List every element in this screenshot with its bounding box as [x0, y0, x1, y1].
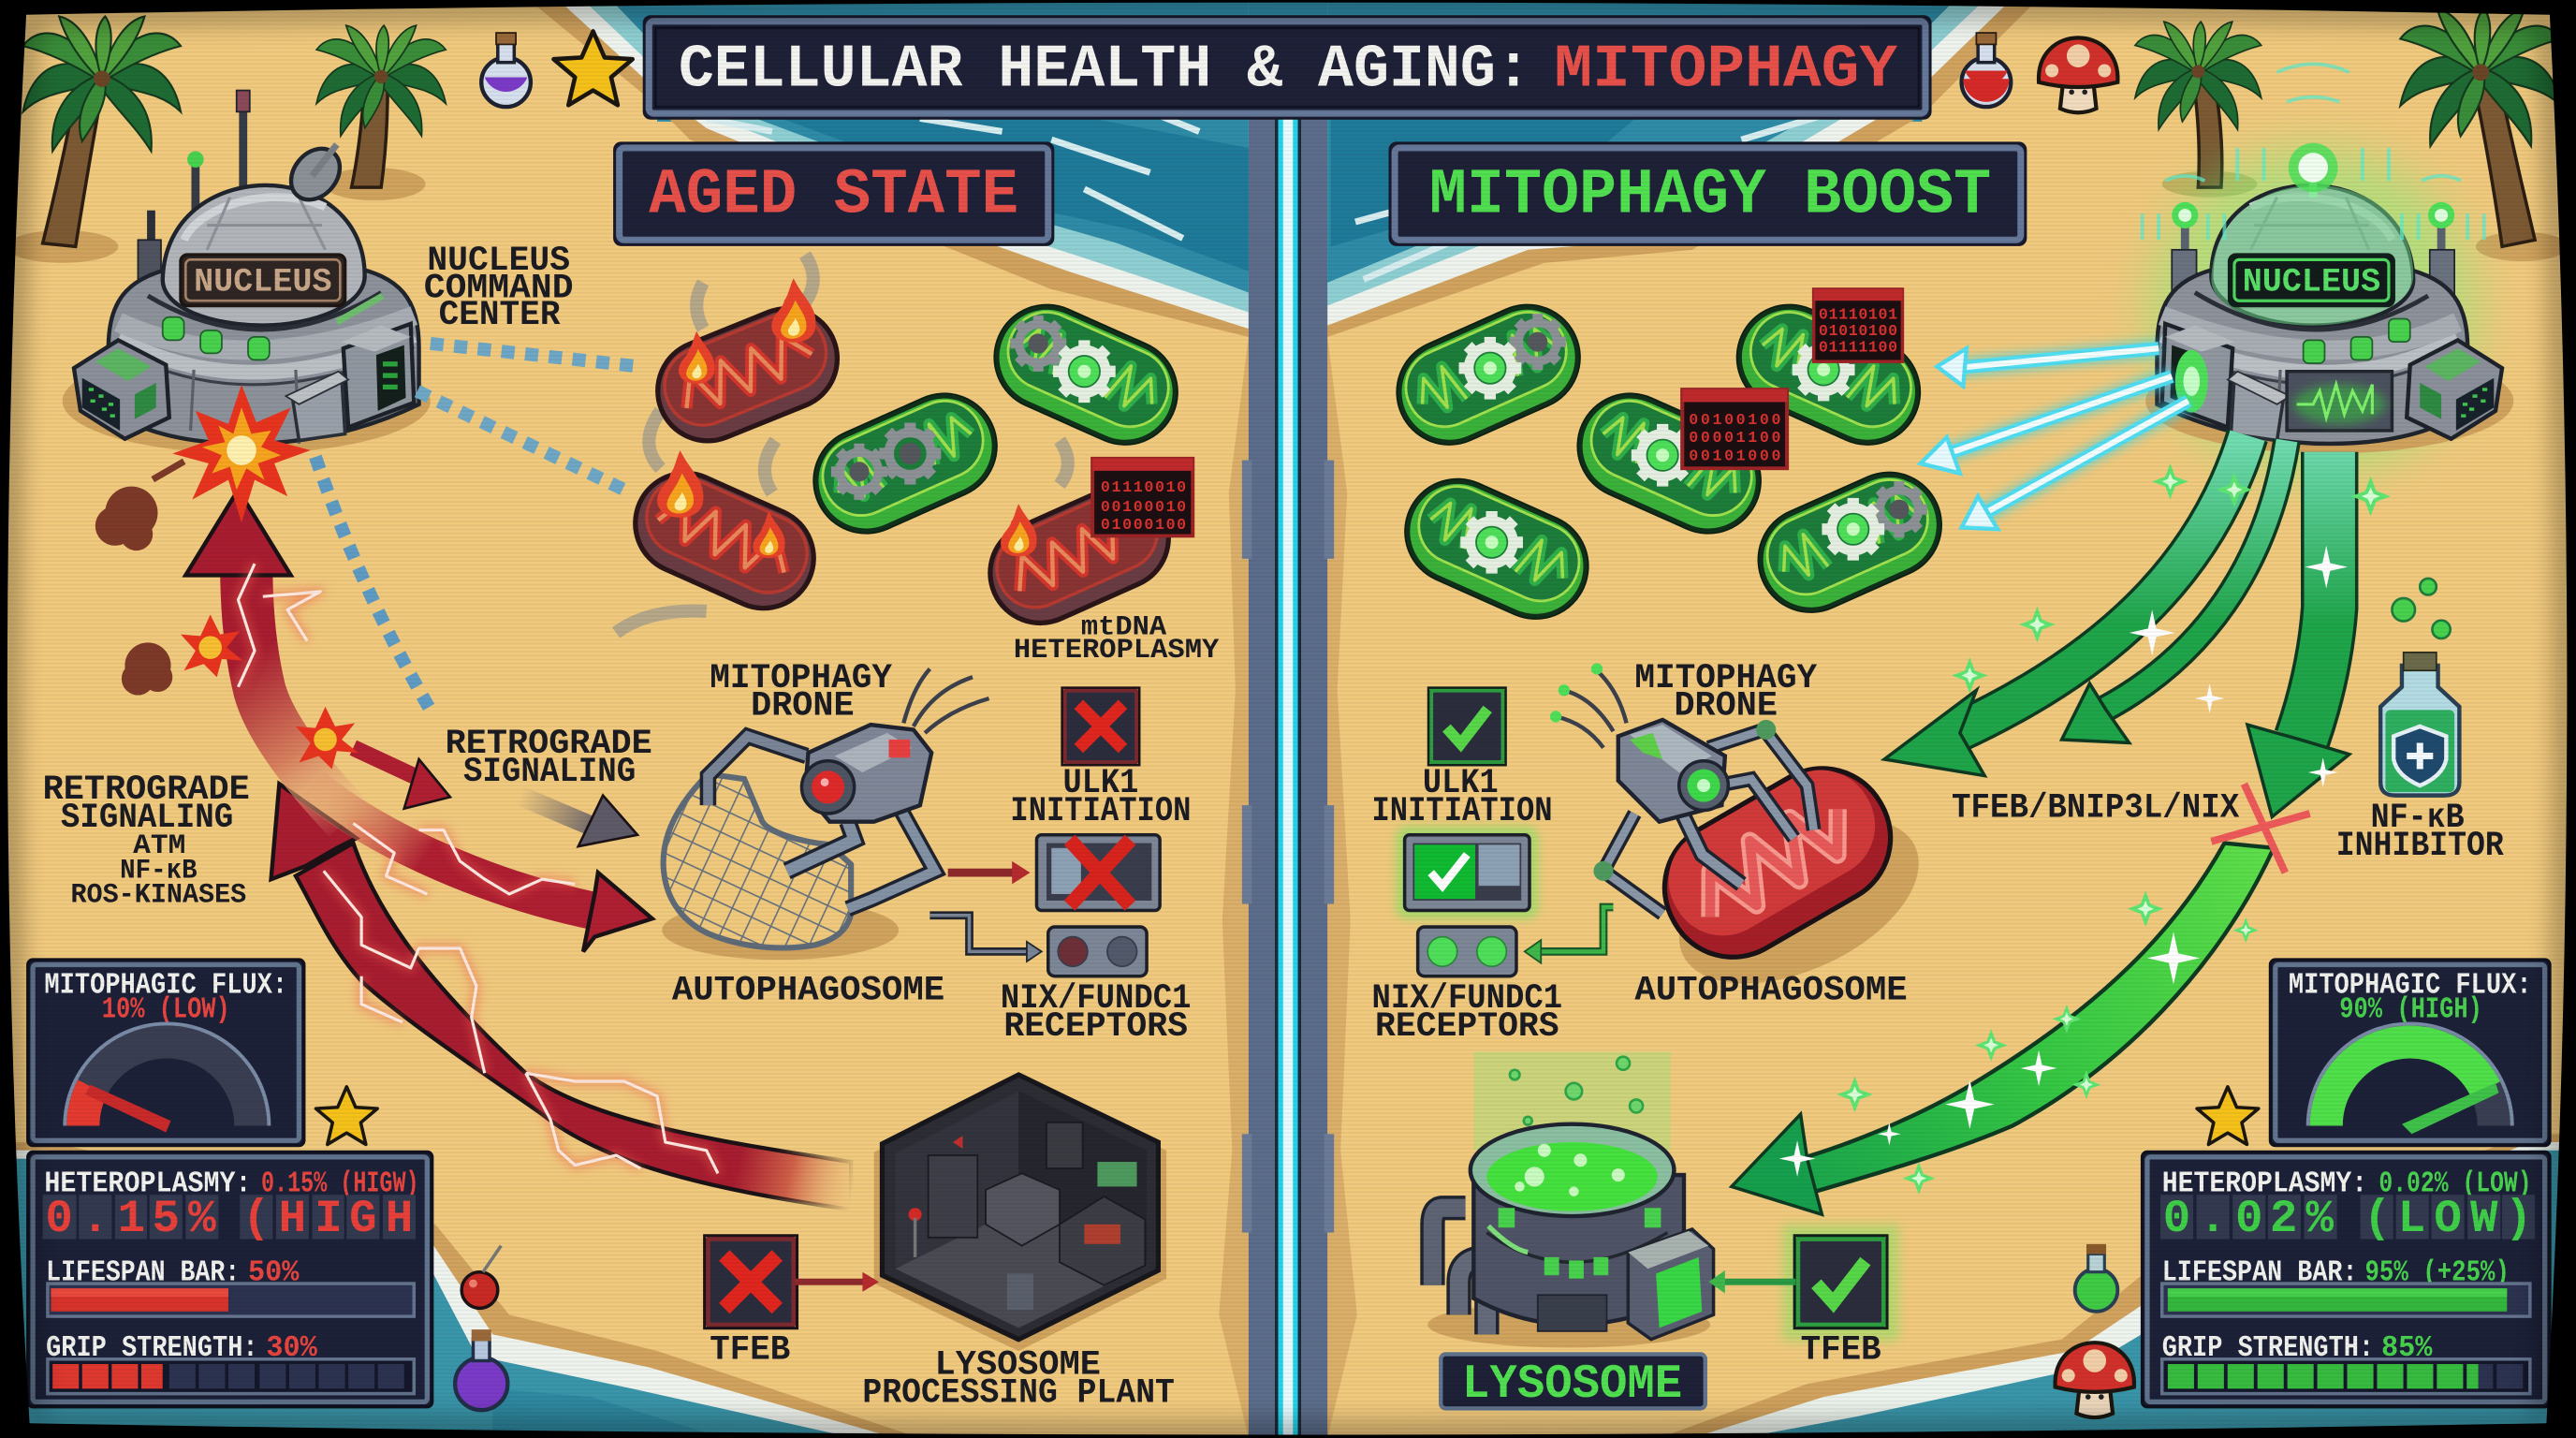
icon: tfeb check — [1782, 1225, 1899, 1341]
panel: mitophagic flux low: MITOPHAGIC FLUX: — [44, 969, 287, 1002]
icon: ulk1 x — [1062, 688, 1139, 765]
label: tfeb bnip3l nix: TFEB/BNIP3L/NIX — [1952, 788, 2240, 828]
green arrow large to lysosome — [1732, 844, 2274, 1214]
readout aged: H — [386, 1193, 413, 1245]
label: nix receptors left: NIX/FUNDC1 — [1001, 979, 1191, 1019]
arrow: to switch — [948, 861, 1030, 884]
label: nucleus command center: NUCLEUS — [427, 242, 570, 281]
code panel lower right — [1682, 389, 1787, 468]
lysosome processing plant — [874, 1075, 1166, 1351]
icon: purple potion bottom — [455, 1329, 507, 1410]
drone left with net — [662, 668, 989, 960]
title banner: CELLULAR HEALTH & AGING: — [679, 35, 1531, 104]
icon: star left panel — [315, 1087, 377, 1144]
receptors on — [1418, 927, 1516, 976]
connector green — [1525, 907, 1614, 963]
label: mitophagy drone right: DRONE — [1674, 687, 1778, 726]
green arrow B — [2062, 440, 2287, 742]
label: ulk1 initiation left: INITIATION — [1010, 792, 1191, 831]
dotted signal lines — [315, 344, 639, 710]
block marker x — [2211, 784, 2310, 873]
mitochondria healthy with gears — [797, 288, 1194, 550]
title banner: MITOPHAGY — [1554, 35, 1897, 104]
readout aged: G — [349, 1193, 377, 1245]
grip bar aged — [48, 1359, 414, 1394]
panel: stats aged: LIFESPAN BAR: — [46, 1256, 240, 1289]
nucleus right — [2143, 64, 2513, 477]
panel: stats aged: GRIP STRENGTH: — [46, 1332, 258, 1365]
label: mtdna heteroplasmy: mtDNA — [1081, 611, 1166, 643]
label: nucleus command center: CENTER — [439, 296, 561, 335]
code panel left: 00100010 — [1101, 499, 1186, 517]
label: mitophagy drone left — [710, 659, 893, 726]
panel: stats boosted: LIFESPAN BAR: — [2162, 1256, 2358, 1289]
label: nix receptors right: RECEPTORS — [1375, 1007, 1559, 1047]
label: retrograde signaling left: RETROGRADE — [43, 770, 250, 810]
readout aged — [43, 1193, 416, 1245]
icon: mushroom bottom — [2056, 1343, 2134, 1417]
icon: mushroom top — [2039, 37, 2117, 112]
readout boosted: % — [2305, 1193, 2334, 1245]
label: mtdna heteroplasmy — [1014, 611, 1219, 666]
switch enabled — [1397, 827, 1538, 918]
panel: stats boosted — [2143, 1152, 2550, 1407]
label: nix receptors left — [1001, 979, 1191, 1047]
nucleus sign right: NUCLEUS — [2243, 264, 2380, 301]
label: lysosome processing plant — [862, 1346, 1175, 1413]
label: nix receptors right: NIX/FUNDC1 — [1372, 979, 1562, 1019]
panel: stats aged: 50% — [248, 1256, 299, 1289]
label: mitophagy drone left: MITOPHAGY — [710, 659, 893, 698]
panel: stats aged — [28, 1152, 432, 1407]
heading: lysosome: LYSOSOME — [1462, 1358, 1682, 1412]
label: retrograde signaling center — [446, 725, 652, 792]
label: retrograde signaling left: ATM — [133, 829, 185, 861]
ocean: top center — [529, 0, 2037, 337]
icon: star top — [553, 31, 633, 105]
readout boosted: 0 — [2235, 1193, 2262, 1245]
label: nucleus command center — [424, 242, 574, 335]
arrow: tfeb to lysosome — [1708, 1270, 1795, 1294]
readout aged: 5 — [153, 1193, 180, 1245]
code panel lower right: 00001100 — [1689, 430, 1781, 448]
readout aged: ( — [242, 1193, 271, 1245]
icon: tfeb x — [705, 1236, 798, 1328]
small red arrow — [353, 748, 450, 809]
label: nf-kb inhibitor: NF-κB — [2371, 799, 2465, 838]
lysosome vat — [1427, 1051, 1714, 1347]
lifespan bar aged — [48, 1284, 414, 1316]
readout boosted: . — [2199, 1193, 2227, 1245]
code panel upper right: 01111100 — [1819, 340, 1897, 358]
icon: red potion top — [1962, 33, 2011, 107]
label: nix receptors left: RECEPTORS — [1003, 1007, 1188, 1047]
panel: stats boosted: 0.02% (LOW) — [2378, 1168, 2532, 1201]
receptors off — [1048, 927, 1147, 976]
label: tfeb left: TFEB — [710, 1331, 790, 1371]
readout boosted — [2160, 1193, 2535, 1245]
code panel left — [1092, 459, 1193, 536]
switch disabled — [1036, 835, 1160, 911]
readout aged: I — [315, 1193, 343, 1245]
panel: stats boosted: GRIP STRENGTH: — [2162, 1332, 2374, 1365]
heading: mitophagy boost — [1390, 143, 2026, 245]
readout aged: 0 — [45, 1193, 73, 1245]
drone right with mitochondrion — [1550, 663, 1944, 1018]
label: nf-kb inhibitor: INHIBITOR — [2336, 827, 2505, 866]
label: lysosome processing plant: LYSOSOME — [935, 1346, 1101, 1386]
nucleus left — [63, 91, 431, 453]
code panel upper right — [1814, 289, 1902, 361]
connector to receptors — [929, 916, 1042, 961]
gray arrow — [520, 796, 637, 846]
icon: bomb — [461, 1246, 501, 1308]
label: autophagosome right: AUTOPHAGOSOME — [1634, 971, 1908, 1010]
label: mitophagy drone left: DRONE — [751, 687, 855, 726]
cyan arrows — [1921, 348, 2188, 529]
lightning — [238, 564, 718, 1173]
heading: mitophagy boost: MITOPHAGY BOOST — [1429, 158, 1991, 231]
mitochondria damaged — [616, 255, 1188, 642]
explosion small center — [296, 707, 359, 770]
mitochondrion captured — [1637, 741, 1918, 985]
label: retrograde signaling left: NF-κB — [120, 854, 198, 886]
lifespan bar boosted — [2162, 1284, 2530, 1316]
label: retrograde signaling center: RETROGRADE — [446, 725, 652, 764]
label: nucleus command center: COMMAND — [424, 270, 574, 309]
label: tfeb right: TFEB — [1801, 1331, 1881, 1371]
nucleus sign — [181, 255, 345, 306]
code panel upper right: 01010100 — [1819, 323, 1897, 341]
ocean: bottom corners — [0, 1134, 2576, 1438]
label: ulk1 initiation right — [1372, 764, 1553, 831]
readout boosted: 2 — [2270, 1193, 2297, 1245]
label: retrograde signaling left: SIGNALING — [61, 799, 233, 838]
icon: ulk1 check — [1428, 688, 1506, 765]
code panel lower right: 00101000 — [1689, 448, 1781, 466]
readout boosted: O — [2434, 1193, 2462, 1245]
readout aged: % — [188, 1193, 216, 1245]
gauge low — [66, 1024, 269, 1132]
panel: stats boosted: 85% — [2381, 1332, 2432, 1365]
panel: mitophagic flux high: 90% (HIGH) — [2339, 994, 2482, 1027]
readout boosted: ) — [2505, 1193, 2532, 1245]
green arrow C — [2247, 452, 2349, 816]
label: autophagosome left: AUTOPHAGOSOME — [672, 971, 944, 1010]
heading: aged state — [614, 143, 1053, 245]
code panel upper right: 01110101 — [1819, 307, 1897, 325]
label: ulk1 initiation left: ULK1 — [1063, 764, 1138, 803]
readout boosted: 0 — [2163, 1193, 2190, 1245]
label: ulk1 initiation right: INITIATION — [1372, 792, 1553, 831]
arrow: tfeb to plant — [795, 1272, 879, 1292]
panel: stats boosted: 95% (+25%) — [2364, 1256, 2510, 1289]
readout aged: H — [279, 1193, 306, 1245]
panel: stats aged: 30% — [266, 1332, 317, 1365]
palm trees — [7, 8, 2568, 263]
smoke puff upper — [95, 459, 185, 550]
label: nf-kb inhibitor — [2336, 799, 2505, 866]
panel: mitophagic flux high — [2271, 960, 2550, 1146]
center divider — [1242, 115, 1334, 1438]
icon: green potion — [2075, 1244, 2117, 1312]
title banner — [644, 17, 1930, 118]
red arrow: retrograde up — [185, 490, 348, 818]
smoke puff lower — [122, 642, 172, 696]
red arrow: lower arc — [271, 784, 851, 1210]
panel: mitophagic flux high: MITOPHAGIC FLUX: — [2289, 969, 2532, 1002]
green arrow A — [1884, 435, 2247, 776]
label: mitophagy drone right — [1634, 659, 1818, 726]
label: retrograde signaling center: SIGNALING — [463, 753, 636, 792]
readout boosted: W — [2470, 1193, 2498, 1245]
red arrow: to drone — [312, 785, 652, 951]
label: retrograde signaling left — [43, 770, 250, 911]
label: mtdna heteroplasmy: HETEROPLASMY — [1014, 634, 1219, 666]
readout boosted: ( — [2364, 1193, 2391, 1245]
gauge high — [2308, 1024, 2512, 1134]
icon: star right panel — [2197, 1087, 2259, 1144]
explosion main — [172, 385, 311, 522]
nucleus sign right — [2230, 255, 2393, 306]
panel: stats aged: 0.15% (HIGW) — [261, 1168, 419, 1201]
autophagosome net — [664, 774, 851, 947]
mitochondria healthy right — [1380, 288, 1958, 636]
label: ulk1 initiation left — [1010, 764, 1191, 831]
panel: stats boosted: HETEROPLASMY: — [2162, 1168, 2367, 1201]
explosion small left — [181, 615, 243, 677]
readout aged: 1 — [118, 1193, 145, 1245]
readout aged: . — [81, 1193, 110, 1245]
code panel left: 01000100 — [1101, 517, 1186, 535]
code panel lower right: 00100100 — [1689, 412, 1781, 430]
panel: mitophagic flux low — [28, 960, 304, 1146]
label: mitophagy drone right: MITOPHAGY — [1634, 659, 1818, 698]
icon: nf-kb inhibitor — [2380, 579, 2459, 796]
nucleus sign: NUCLEUS — [194, 264, 332, 301]
sparkles — [1779, 463, 2391, 1195]
panel: mitophagic flux low: 10% (LOW) — [102, 994, 230, 1027]
label: ulk1 initiation right: ULK1 — [1423, 764, 1499, 803]
label: nix receptors right — [1372, 979, 1562, 1047]
code panel left: 01110010 — [1101, 479, 1186, 497]
icon: purple potion top — [481, 33, 531, 107]
label: lysosome processing plant: PROCESSING PLANT — [862, 1373, 1175, 1413]
heading: aged state: AGED STATE — [649, 158, 1018, 231]
panel: stats aged: HETEROPLASMY: — [44, 1168, 252, 1201]
label: retrograde signaling left: ROS-KINASES — [70, 879, 246, 911]
readout boosted: L — [2398, 1193, 2425, 1245]
grip bar boosted — [2162, 1359, 2530, 1394]
